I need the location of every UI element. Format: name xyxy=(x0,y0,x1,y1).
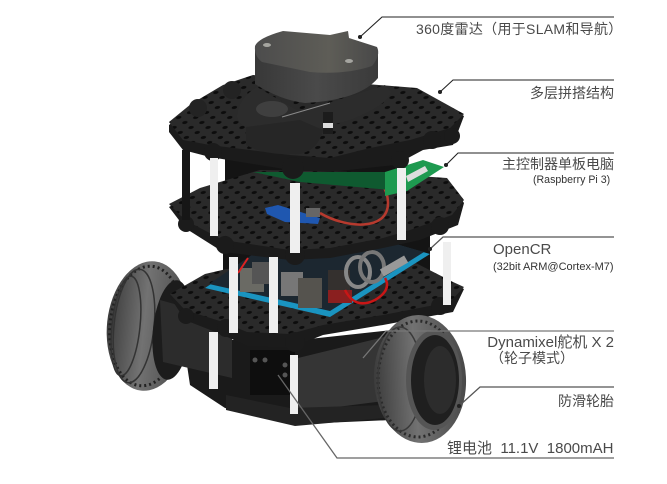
right wheel xyxy=(371,313,469,445)
lidar sensor xyxy=(237,31,391,154)
label: multilayer structure: 多层拼搭结构 xyxy=(530,85,614,101)
Raspberry Pi board xyxy=(253,160,444,196)
second plate xyxy=(169,170,464,265)
white standoffs xyxy=(182,150,451,414)
label: Dynamixel: Dynamixel舵机 X 2 xyxy=(487,334,614,351)
label: battery: 锂电池 11.1V 1800mAH xyxy=(447,440,613,457)
label: raspberry pi: (Raspberry Pi 3) xyxy=(533,174,610,186)
bottom layer: motor body and plate xyxy=(160,300,392,426)
label: OpenCR: OpenCR xyxy=(493,241,551,258)
label: main controller: 主控制器单板电脑 xyxy=(502,156,614,172)
left wheel xyxy=(100,257,196,395)
inner frame: dark space between layers xyxy=(223,150,430,300)
third plate xyxy=(170,252,464,352)
label: wheel mode: （轮子模式） xyxy=(490,350,574,366)
label: lidar: 360度雷达（用于SLAM和导航） xyxy=(416,21,623,37)
label: tire: 防滑轮胎 xyxy=(558,393,614,409)
top plate xyxy=(169,75,464,179)
OpenCR board with components xyxy=(205,228,430,317)
label: OpenCR spec: (32bit ARM@Cortex-M7) xyxy=(493,261,614,273)
callout lines xyxy=(278,17,614,458)
